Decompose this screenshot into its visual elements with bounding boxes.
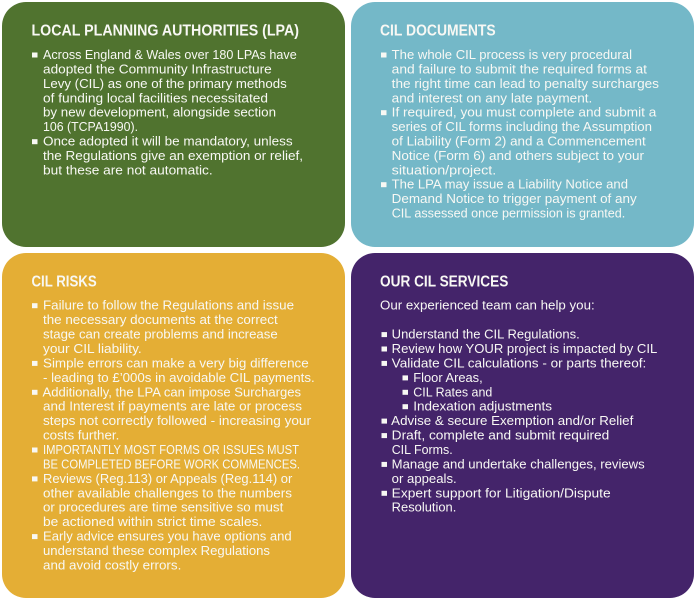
bullet: simple errors: Simple errors can make a very big difference — [43, 356, 309, 370]
bullet: adoption of CIL: of funding local facilities necessitated — [43, 91, 268, 105]
bullet: procedural process: the right time can lead to penalty surcharges — [392, 77, 659, 91]
bullet: reviews and appeals: be actioned within strict time scales. — [43, 515, 262, 529]
bullet: early advice: Early advice ensures you have options and — [43, 530, 292, 544]
panel: local planning authorities — [2, 2, 345, 247]
panel: CIL documents — [351, 2, 694, 247]
bullet: simple errors: - leading to £’000s in avoidable CIL payments. — [43, 371, 315, 385]
bullet: liability notice: Demand Notice to trigger payment of any — [392, 192, 637, 206]
heading: local planning authorities: LOCAL PLANNING AUTHORITIES (LPA) — [32, 23, 299, 40]
bullet: challenges and appeals — [382, 457, 645, 486]
bullet: adoption of CIL: Across England & Wales over 180 LPAs have — [43, 48, 297, 62]
bullet: mandatory once adopted: Once adopted it will be mandatory, unless — [43, 135, 293, 149]
bullet: surcharges and interest — [32, 385, 311, 443]
bullet: adoption of CIL — [32, 48, 297, 134]
bullet: surcharges and interest: costs further. — [43, 429, 119, 443]
bullet: reviews and appeals: Reviews (Reg.113) or Appeals (Reg.114) or — [43, 472, 292, 486]
bullet: liability notice: CIL assessed once permission is granted. — [392, 207, 625, 221]
bullet: failure to follow regulations: Failure to follow the Regulations and issue — [43, 299, 294, 313]
bullet: surcharges and interest: and Interest if payments are late or process — [43, 400, 302, 414]
bullet: reviews and appeals — [32, 472, 292, 529]
bullet: surcharges and interest: steps not correctly followed - increasing your — [43, 414, 311, 428]
bullet: surcharges and interest: Additionally, the LPA can impose Surcharges — [42, 385, 301, 399]
bullet: CIL forms: Notice (Form 6) and others subject to your — [392, 149, 644, 163]
bullet: CIL forms — [382, 429, 609, 457]
bullet: validate calculations: Validate CIL calculations - or parts thereof: — [392, 356, 646, 370]
heading: CIL documents: CIL DOCUMENTS — [380, 23, 496, 40]
heading: CIL risks: CIL RISKS — [32, 274, 97, 291]
bullet: adoption of CIL: adopted the Community Infrastructure — [43, 62, 272, 76]
bullet: mandatory once adopted: the Regulations give an exemption or relief, — [43, 149, 303, 163]
bullet: failure to follow regulations: stage can create problems and increase — [43, 328, 278, 342]
bullet: reviews and appeals: or procedures are time sensitive so must — [43, 501, 284, 515]
bullet: exemption and relief: Advise & secure Exemption and/or Relief — [391, 414, 634, 428]
bullet: review project impact: Review how YOUR project is impacted by CIL — [392, 342, 657, 356]
bullet: adoption of CIL: 106 (TCPA1990). — [43, 120, 138, 134]
bullet: failure to follow regulations: the necessary documents at the correct — [43, 313, 278, 327]
bullet: reviews and appeals: other available challenges to the numbers — [43, 486, 292, 500]
sub-bullet: indexation adjustments: Indexation adjustments — [413, 400, 552, 414]
bullet: mandatory once adopted: but these are not automatic. — [43, 163, 213, 177]
bullet: CIL forms: situation/project. — [392, 163, 496, 177]
bullet: early advice: and avoid costly errors. — [43, 558, 181, 572]
bullet: procedural process: and interest on any late payment. — [392, 91, 592, 105]
heading: our CIL services: OUR CIL SERVICES — [380, 274, 508, 291]
bullet: CIL forms: CIL Forms. — [392, 443, 453, 457]
bullet: procedural process: The whole CIL process is very procedural — [392, 48, 632, 62]
bullet: CIL forms: Draft, complete and submit required — [392, 429, 609, 443]
bullet: early advice: understand these complex Regulations — [43, 544, 270, 558]
panel: CIL risks — [2, 253, 345, 598]
bullet: complete before work commences: IMPORTANTLY MOST FORMS OR ISSUES MUST — [43, 443, 299, 457]
bullet: liability notice: The LPA may issue a Liability Notice and — [392, 178, 628, 192]
bullet: litigation support: Resolution. — [392, 501, 456, 515]
bullet: CIL forms: If required, you must complete and submit a — [392, 106, 656, 120]
bullet: understand regulations: Understand the CIL Regulations. — [392, 328, 580, 342]
bullet: procedural process — [381, 48, 659, 105]
bullet: simple errors — [32, 356, 315, 385]
bullet: adoption of CIL: by new development, alongside section — [43, 106, 276, 120]
bullet: challenges and appeals: or appeals. — [392, 472, 457, 486]
bullet: failure to follow regulations: your CIL liability. — [43, 342, 142, 356]
panel: our CIL services — [351, 253, 694, 598]
sub-bullet: floor areas: Floor Areas, — [413, 371, 483, 385]
bullet: litigation support — [382, 486, 611, 515]
bullet: challenges and appeals: Manage and undertake challenges, reviews — [392, 457, 645, 471]
bullet: failure to follow regulations — [32, 299, 294, 356]
sub-bullet: CIL rates: CIL Rates and — [413, 385, 492, 399]
bullet: liability notice — [381, 178, 637, 221]
bullet: procedural process: and failure to submit the required forms at — [392, 62, 648, 76]
bullet: CIL forms: series of CIL forms including the Assumption — [392, 120, 652, 134]
bullet: adoption of CIL: Levy (CIL) as one of the primary methods — [43, 77, 287, 91]
bullet: early advice — [32, 530, 292, 572]
bullet: complete before work commences: BE COMPLETED BEFORE WORK COMMENCES. — [43, 457, 300, 471]
intro text: Our experienced team can help you: — [380, 299, 595, 313]
bullet: complete before work commences — [32, 443, 300, 471]
bullet: CIL forms: of Liability (Form 2) and a Commencement — [392, 135, 646, 149]
bullet: mandatory once adopted — [32, 135, 303, 177]
bullet: CIL forms — [381, 106, 656, 177]
bullet: litigation support: Expert support for Litigation/Dispute — [392, 486, 611, 500]
